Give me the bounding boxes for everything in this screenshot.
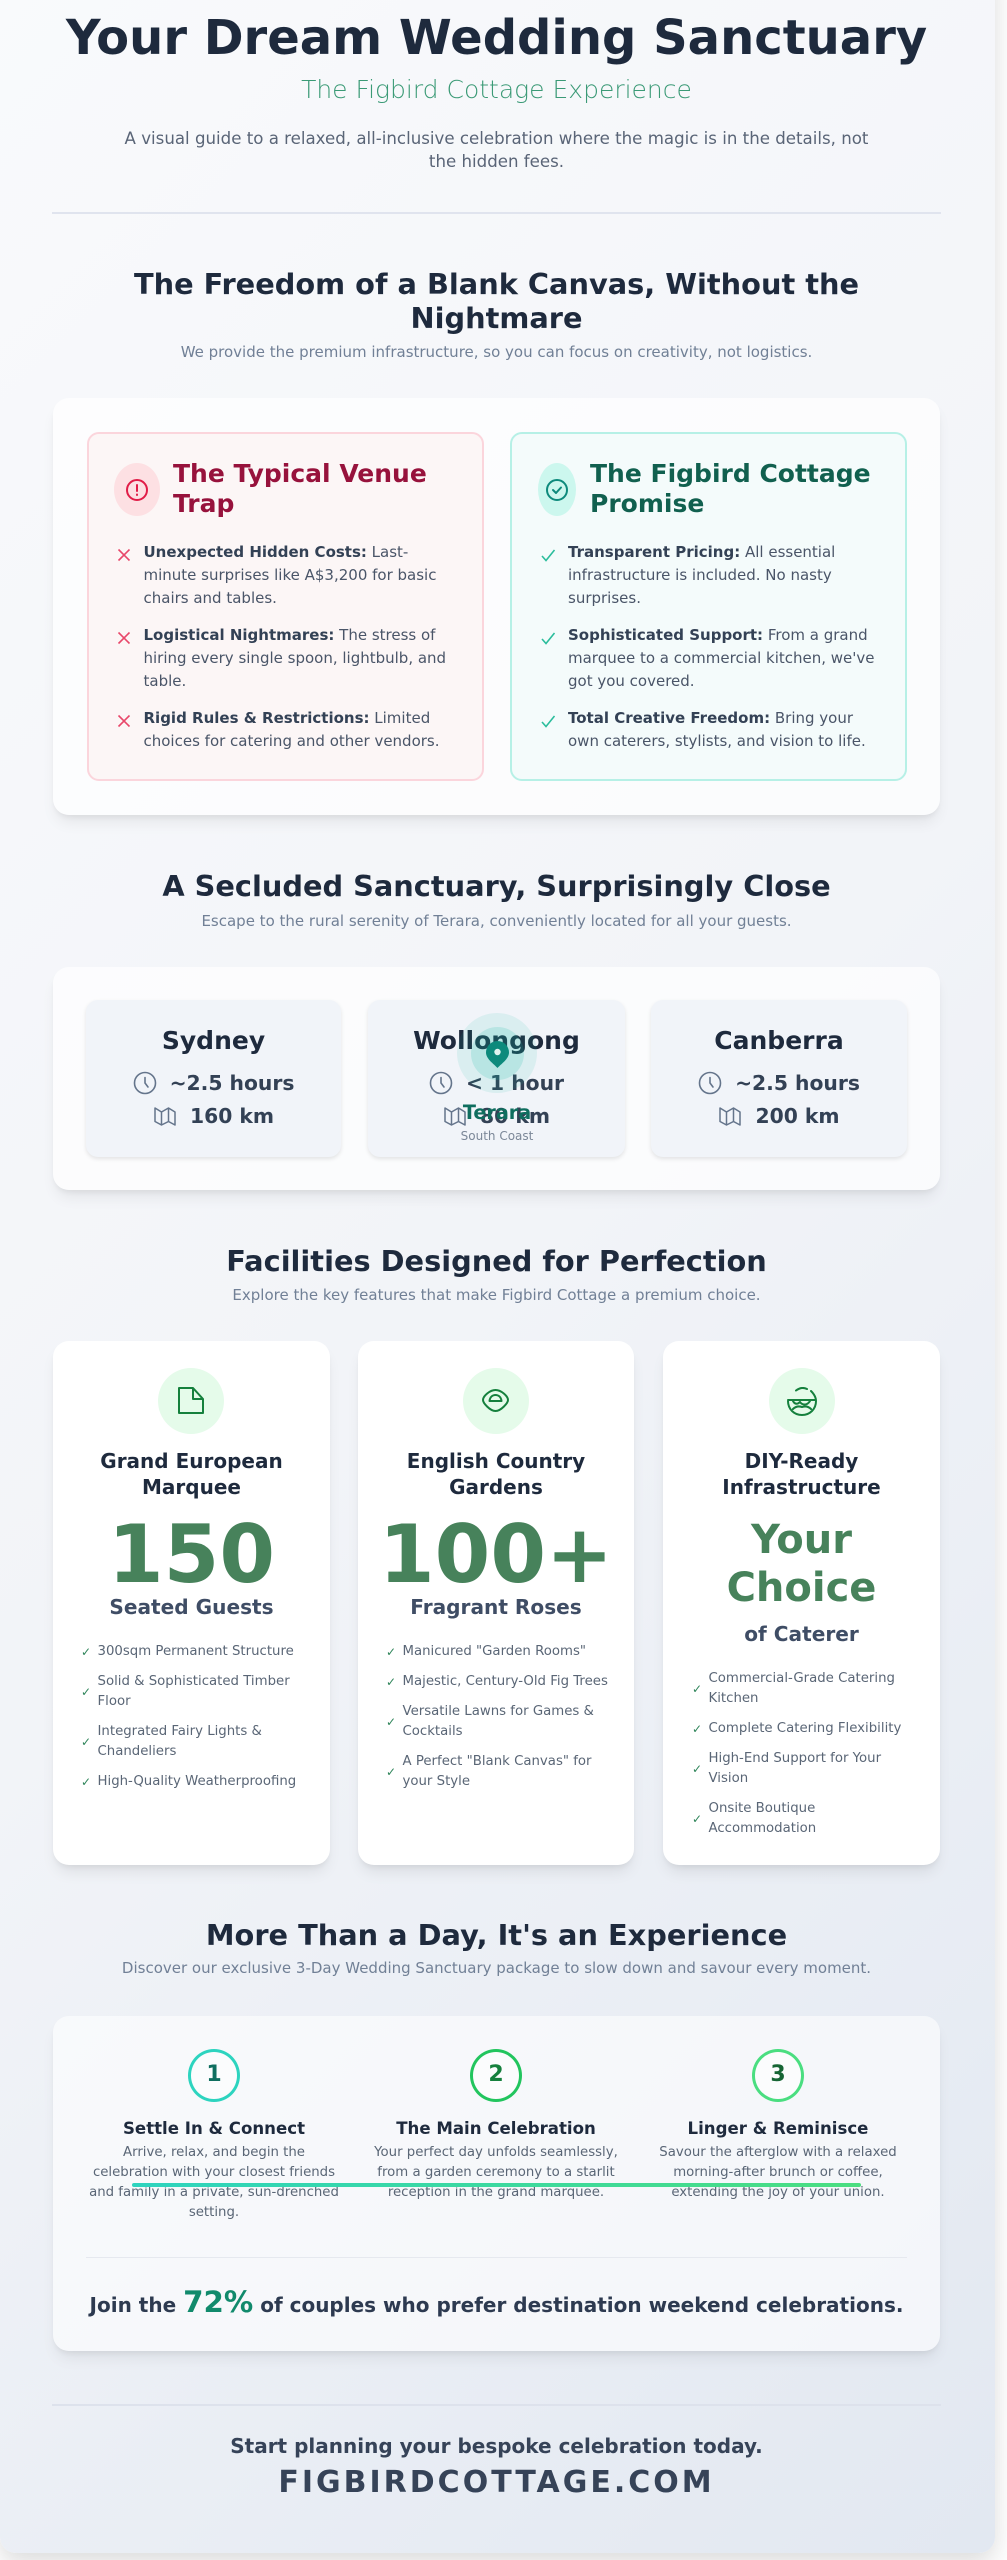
item: hidden costs: minute surprises like A$3,200 for basic bbox=[144, 566, 436, 584]
item: support: marquee to a commercial kitchen, we've bbox=[568, 649, 874, 667]
intro text: A visual guide to a relaxed, all-inclusive celebration where the magic is in the details, not bbox=[125, 129, 868, 148]
item: logistics: hiring every single spoon, lightbulb, and bbox=[144, 649, 446, 667]
card: marquee bbox=[53, 1341, 330, 1865]
card: infrastructure: ✓ bbox=[692, 1682, 702, 1696]
website: FIGBIRDCOTTAGE.COM bbox=[278, 2465, 715, 2500]
card: gardens: Cocktails bbox=[402, 1724, 463, 1738]
card: infrastructure: DIY-Ready bbox=[745, 1449, 858, 1473]
card: infrastructure: of Caterer bbox=[744, 1622, 859, 1646]
subheading: facilities: Explore the key features that make Figbird Cottage a premium choice. bbox=[232, 1286, 761, 1304]
item: logistics bbox=[118, 626, 446, 690]
item: support: Sophisticated Support: From a grand bbox=[568, 626, 868, 644]
step 1: setting. bbox=[189, 2204, 239, 2220]
card: marquee: ✓ bbox=[81, 1684, 91, 1698]
step 1: 1 bbox=[206, 2062, 222, 2087]
heading: promise: Promise bbox=[590, 489, 704, 518]
step 1: Settle In & Connect bbox=[123, 2118, 305, 2138]
call to action: Start planning your bespoke celebration today. bbox=[230, 2434, 763, 2458]
card: infrastructure: Accommodation bbox=[708, 1821, 816, 1836]
card: marquee: Integrated Fairy Lights & bbox=[98, 1724, 262, 1738]
step 3: 3 bbox=[770, 2062, 786, 2087]
card: gardens: Majestic, Century-Old Fig Trees bbox=[402, 1674, 608, 1688]
card: gardens: ✓ bbox=[386, 1714, 396, 1728]
step 2: reception in the grand marquee. bbox=[388, 2184, 604, 2200]
heading: experience: More Than a Day, It's an Experience bbox=[206, 1918, 787, 1952]
card: marquee: ✓ bbox=[81, 1774, 91, 1788]
intro text bbox=[124, 129, 868, 171]
card: infrastructure: High-End Support for Your bbox=[708, 1751, 881, 1766]
label: South Coast: South Coast bbox=[461, 1129, 533, 1143]
item: rules: choices for catering and other vendors. bbox=[144, 732, 440, 750]
card: gardens: Versatile Lawns for Games & bbox=[402, 1704, 594, 1718]
icon: pin bbox=[486, 1041, 509, 1068]
step 1: Arrive, relax, and begin the bbox=[123, 2144, 305, 2160]
heading: trap: The Typical Venue bbox=[173, 459, 427, 488]
card: infrastructure: Your bbox=[751, 1517, 852, 1563]
card: Canberra bbox=[651, 1000, 907, 1157]
card: marquee: ✓ bbox=[81, 1734, 91, 1748]
subheading: blank canvas: We provide the premium infrastructure, so you can focus on creativity, not logistics. bbox=[181, 343, 812, 361]
card: infrastructure: ✓ bbox=[692, 1762, 702, 1776]
item: hidden costs bbox=[118, 542, 436, 607]
card: infrastructure: Onsite Boutique bbox=[708, 1801, 815, 1816]
heading: blank canvas bbox=[134, 267, 859, 335]
card: Sydney: ~2.5 hours bbox=[170, 1070, 294, 1094]
card: gardens: Manicured "Garden Rooms" bbox=[402, 1644, 586, 1658]
card: Sydney: 160 km bbox=[190, 1104, 274, 1128]
card: Wollongong: < 1 hour bbox=[466, 1070, 564, 1094]
step 3 bbox=[659, 2049, 897, 2200]
heading: trap: Trap bbox=[173, 489, 234, 518]
heading: promise bbox=[590, 459, 871, 518]
marker: Terara bbox=[457, 1013, 537, 1143]
statistic callout: Join the 72% of couples who prefer destination weekend celebrations. bbox=[90, 2285, 903, 2319]
card: gardens: English Country bbox=[407, 1449, 585, 1473]
card: typical venue trap bbox=[87, 432, 484, 781]
card: marquee: Grand European bbox=[100, 1449, 283, 1473]
item: pricing bbox=[542, 542, 835, 607]
step 3: Savour the afterglow with a relaxed bbox=[659, 2144, 897, 2160]
card: marquee: 150 bbox=[108, 1508, 275, 1601]
card: marquee: Chandeliers bbox=[98, 1744, 176, 1758]
card: infrastructure: ✓ bbox=[692, 1812, 702, 1826]
item: pricing: Transparent Pricing: All essential bbox=[568, 542, 835, 560]
item: hidden costs: chairs and tables. bbox=[144, 589, 277, 607]
item: support: got you covered. bbox=[568, 672, 695, 690]
item: rules: Rigid Rules & Restrictions: Limited bbox=[144, 709, 430, 727]
step 2 bbox=[374, 2049, 618, 2200]
item: logistics: table. bbox=[144, 672, 186, 690]
card: marquee: ✓ bbox=[81, 1644, 91, 1658]
card: marquee: Solid & Sophisticated Timber bbox=[98, 1674, 290, 1688]
card: gardens: Fragrant Roses bbox=[410, 1595, 582, 1619]
card: gardens bbox=[358, 1341, 634, 1865]
card: infrastructure: Infrastructure bbox=[722, 1475, 881, 1499]
panel: timeline bbox=[53, 2016, 940, 2351]
step 2: The Main Celebration bbox=[396, 2118, 596, 2138]
panel: location distances bbox=[53, 967, 940, 1190]
timeline connector bbox=[132, 2183, 861, 2187]
icon: garden bbox=[462, 1368, 528, 1434]
card: infrastructure bbox=[663, 1341, 940, 1865]
heading: blank canvas: The Freedom of a Blank Canvas, Without the bbox=[134, 267, 859, 301]
icon: globe bbox=[769, 1368, 835, 1434]
header divider bbox=[52, 212, 941, 214]
title: Your Dream Wedding Sanctuary bbox=[66, 10, 927, 66]
item: freedom: own caterers, stylists, and vision to life. bbox=[568, 732, 866, 750]
item: logistics: Logistical Nightmares: The stress of bbox=[144, 626, 435, 644]
card: infrastructure: Commercial-Grade Catering bbox=[708, 1671, 895, 1686]
icon: check circle bbox=[538, 463, 576, 516]
item: support bbox=[542, 626, 874, 690]
heading: trap bbox=[173, 459, 427, 518]
step 2: from a garden ceremony to a starlit bbox=[377, 2164, 615, 2180]
card: Sydney: Sydney bbox=[162, 1026, 265, 1055]
footer bbox=[52, 2404, 840, 2500]
header bbox=[52, 10, 941, 214]
subtitle: The Figbird Cottage Experience bbox=[301, 75, 692, 104]
card: infrastructure: Kitchen bbox=[708, 1691, 758, 1706]
card: Wollongong: 80 km bbox=[480, 1104, 550, 1128]
icon: warning bbox=[114, 463, 160, 516]
label: Terara: Terara bbox=[463, 1101, 531, 1124]
card: Wollongong: Wollongong bbox=[413, 1026, 580, 1055]
step 2: Your perfect day unfolds seamlessly, bbox=[374, 2144, 618, 2160]
card: gardens: your Style bbox=[402, 1774, 470, 1788]
card: infrastructure: ✓ bbox=[692, 1722, 702, 1736]
step 3: Linger & Reminisce bbox=[688, 2118, 868, 2138]
card: infrastructure: Choice bbox=[727, 1565, 876, 1611]
intro text: the hidden fees. bbox=[429, 152, 564, 171]
card: marquee: 300sqm Permanent Structure bbox=[98, 1644, 294, 1658]
card: marquee: Seated Guests bbox=[109, 1595, 274, 1619]
step 1 bbox=[89, 2049, 339, 2220]
card: Canberra: Canberra bbox=[714, 1026, 844, 1055]
item: hidden costs: Unexpected Hidden Costs: Last- bbox=[144, 542, 408, 560]
card: gardens: A Perfect "Blank Canvas" for bbox=[402, 1754, 592, 1768]
card: Sydney bbox=[86, 1000, 341, 1157]
card: marquee: High-Quality Weatherproofing bbox=[98, 1774, 296, 1788]
card: gardens: ✓ bbox=[386, 1764, 396, 1778]
step 1: celebration with your closest friends bbox=[93, 2164, 335, 2180]
card: Canberra: ~2.5 hours bbox=[735, 1070, 860, 1094]
card: figbird promise bbox=[510, 432, 907, 781]
card: marquee: Marquee bbox=[142, 1475, 241, 1499]
step 3: morning-after brunch or coffee, bbox=[673, 2164, 883, 2180]
subheading: experience: Discover our exclusive 3-Day Wedding Sanctuary package to slow down and savour every moment. bbox=[122, 1959, 871, 1977]
heading: facilities: Facilities Designed for Perfection bbox=[226, 1244, 767, 1278]
subheading: location: Escape to the rural serenity of Terara, conveniently located for all your guests. bbox=[201, 912, 792, 930]
step 1: and family in a private, sun-drenched bbox=[89, 2184, 339, 2200]
item: rules bbox=[118, 709, 440, 750]
card: gardens: 100+ bbox=[379, 1508, 613, 1601]
card: gardens: ✓ bbox=[386, 1644, 396, 1658]
item: freedom bbox=[542, 709, 866, 750]
card: infrastructure: Vision bbox=[708, 1771, 748, 1786]
card: Wollongong bbox=[368, 1000, 625, 1157]
heading: blank canvas: Nightmare bbox=[410, 301, 583, 335]
heading: location: A Secluded Sanctuary, Surprisingly Close bbox=[162, 868, 831, 902]
item: pricing: surprises. bbox=[568, 589, 641, 607]
card: marquee: Floor bbox=[98, 1694, 131, 1708]
panel: comparison bbox=[53, 398, 940, 815]
card: infrastructure: Complete Catering Flexibility bbox=[708, 1721, 901, 1736]
card: gardens: ✓ bbox=[386, 1674, 396, 1688]
item: freedom: Total Creative Freedom: Bring your bbox=[568, 709, 853, 727]
heading: promise: The Figbird Cottage bbox=[590, 459, 871, 488]
item: pricing: infrastructure is included. No nasty bbox=[568, 566, 832, 584]
icon: document bbox=[158, 1368, 224, 1434]
step 3: extending the joy of your union. bbox=[671, 2184, 885, 2200]
step 2: 2 bbox=[488, 2062, 504, 2087]
marker rings bbox=[457, 1013, 537, 1093]
card: gardens: Gardens bbox=[449, 1475, 543, 1499]
card: Canberra: 200 km bbox=[755, 1104, 840, 1128]
